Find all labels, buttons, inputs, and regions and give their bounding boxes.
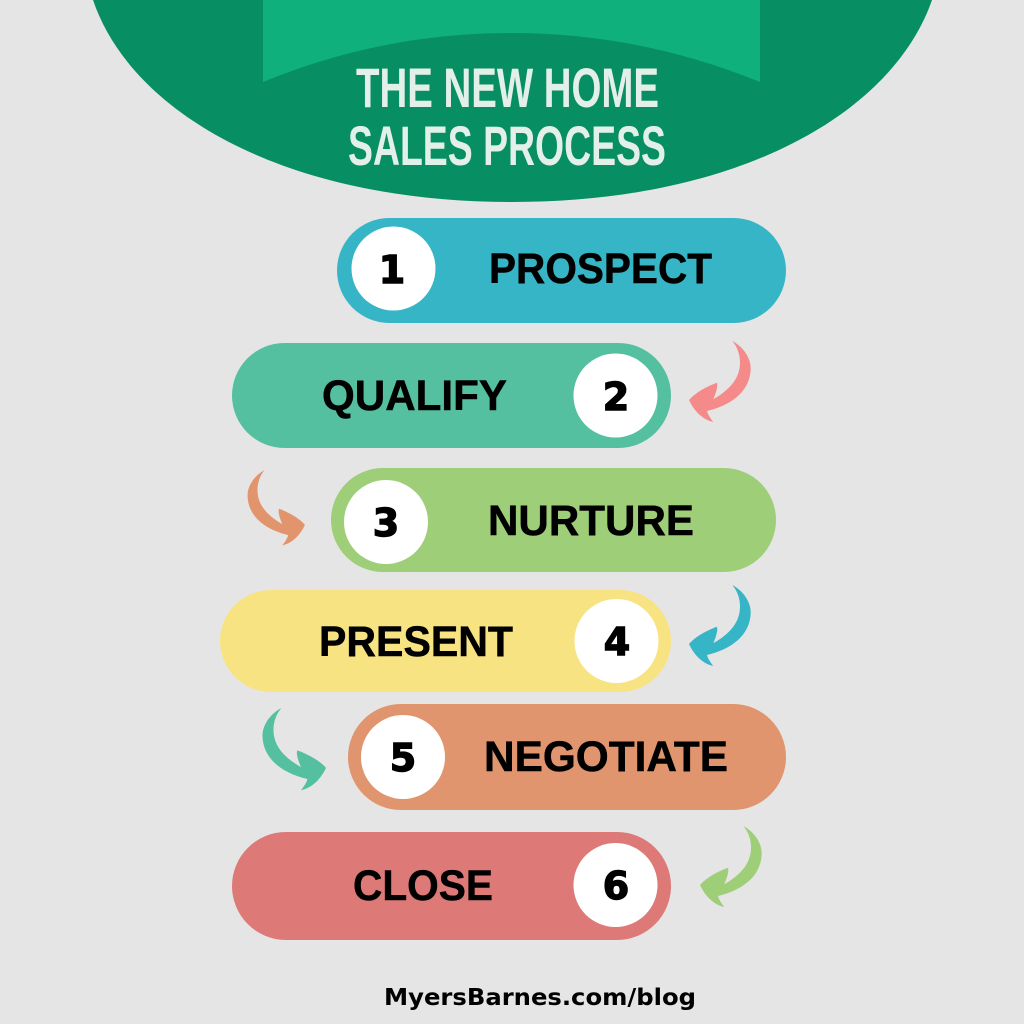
step 6: close: 6 xyxy=(603,864,629,908)
footer url: MyersBarnes.com/blog xyxy=(384,985,696,1011)
step 6: close: CLOSE xyxy=(353,862,493,910)
step 5: negotiate xyxy=(348,704,786,810)
arrow: step 2 to 3 xyxy=(248,470,305,545)
arrow: step 3 to 4 xyxy=(689,585,751,666)
step 1: prospect xyxy=(337,218,786,323)
step 2: qualify xyxy=(232,343,671,448)
arrow: step 4 to 5 xyxy=(262,708,326,790)
step 2: qualify: QUALIFY xyxy=(322,372,507,420)
header: green dome with ribbon and title xyxy=(93,0,932,202)
ribbon xyxy=(263,0,760,82)
title xyxy=(348,56,666,177)
arrow: step 5 to 6 xyxy=(700,826,762,907)
step 4: present xyxy=(220,590,671,692)
step 6: close xyxy=(232,832,671,940)
step 3: nurture xyxy=(331,468,776,572)
arrow: step 1 to 2 xyxy=(689,341,751,422)
title: THE NEW HOME xyxy=(356,56,659,119)
step 2: qualify: 2 xyxy=(603,375,629,419)
step 3: nurture: 3 xyxy=(373,501,399,545)
step 4: present: 4 xyxy=(604,620,630,664)
title: SALES PROCESS xyxy=(348,114,666,177)
step 1: prospect: PROSPECT xyxy=(489,245,712,293)
step 1: prospect: 1 xyxy=(379,248,405,292)
step 4: present: PRESENT xyxy=(319,618,513,666)
step 5: negotiate: NEGOTIATE xyxy=(484,733,728,781)
step 3: nurture: NURTURE xyxy=(488,497,694,545)
step 5: negotiate: 5 xyxy=(390,736,416,780)
